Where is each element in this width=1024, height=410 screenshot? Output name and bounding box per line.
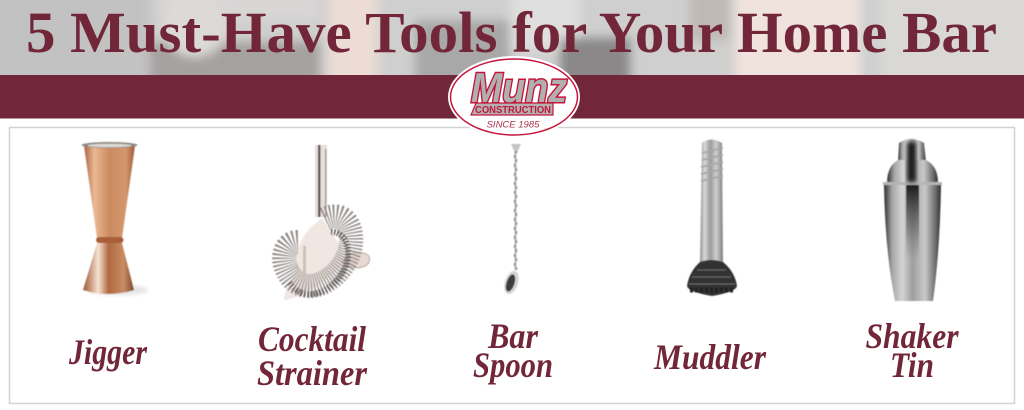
label: Bar Spoon: Spoon (473, 345, 553, 385)
label: Cocktail Strainer (257, 319, 368, 393)
label: Cocktail Strainer: Cocktail (258, 319, 366, 359)
label: Muddler: Muddler (653, 337, 767, 377)
icon: muddler (687, 140, 737, 296)
label: Cocktail Strainer: Strainer (257, 353, 368, 393)
label: Bar Spoon (473, 316, 553, 385)
header photo background (0, 0, 1024, 90)
maroon band (0, 75, 1024, 118)
logo: Munz Construction (448, 56, 580, 138)
label: Shaker Tin (866, 316, 959, 385)
panel: tools frame (10, 128, 1014, 404)
icon: jigger (82, 142, 148, 295)
title: 5 Must-Have Tools for Your Home Bar (26, 0, 997, 65)
icon: cocktail strainer (284, 145, 370, 300)
label: Jigger: Jigger (68, 332, 148, 372)
label: Shaker Tin: Tin (890, 345, 934, 385)
icon: bar spoon (502, 144, 521, 296)
icon: shaker tin (883, 139, 942, 301)
logo: Munz Construction: SINCE 1985 (487, 120, 540, 130)
logo: Munz Construction: Munz (471, 64, 567, 111)
label: Bar Spoon: Bar (487, 316, 539, 356)
logo: Munz Construction: CONSTRUCTION (475, 105, 551, 116)
label: Shaker Tin: Shaker (866, 316, 959, 356)
